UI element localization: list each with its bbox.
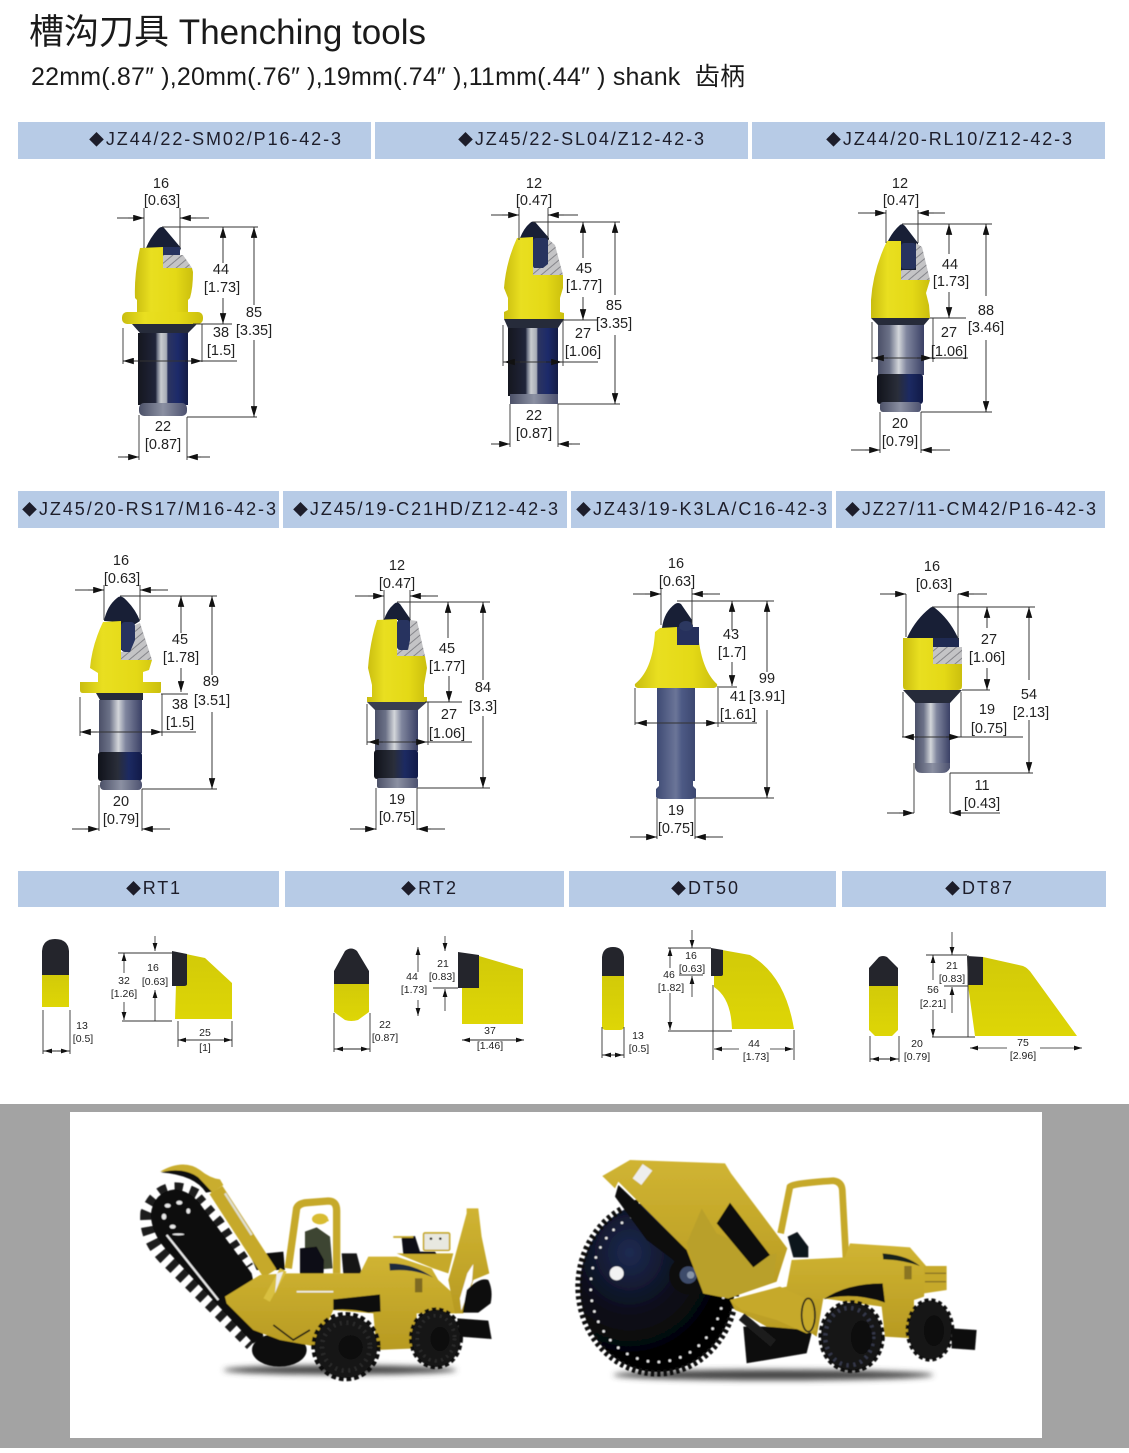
panel: JZ45/20-RS17 <box>18 491 279 831</box>
dimensions: [1.06] <box>969 650 1005 666</box>
panel: RT2 <box>285 871 564 1052</box>
grey backdrop <box>0 1104 1129 1448</box>
dimensions: [2.13] <box>1013 705 1049 721</box>
tip drawings <box>869 956 1077 1036</box>
header band <box>18 491 279 528</box>
dimensions: [0.5] <box>73 1033 93 1045</box>
dimensions <box>334 936 524 1052</box>
dimensions: [1.73] <box>933 274 969 290</box>
dimensions: 16 <box>147 962 159 974</box>
header band <box>569 871 836 907</box>
tip drawings <box>602 947 794 1030</box>
tip drawings <box>334 948 523 1024</box>
dimensions: 25 <box>199 1027 211 1039</box>
dimensions: [1.77] <box>566 278 602 294</box>
dimensions: 44 <box>213 262 229 278</box>
dimensions: [1.73] <box>204 280 240 296</box>
dimensions: [2.96] <box>1010 1050 1036 1062</box>
dimensions: [0.87] <box>145 437 181 453</box>
header band: ◆JZ45/19-C21HD/Z12-42-3 <box>293 499 558 519</box>
dimensions: [3.3] <box>469 699 497 715</box>
dimensions: 89 <box>203 674 219 690</box>
dimensions: 27 <box>441 707 457 723</box>
dimensions <box>117 176 272 460</box>
header band <box>842 871 1106 907</box>
dimensions: 44 <box>942 257 958 273</box>
dimensions: [3.35] <box>596 316 632 332</box>
header band <box>752 122 1105 159</box>
vehicle: rock saw wheel trencher <box>579 1160 977 1380</box>
dimensions <box>350 558 497 830</box>
tool drawing <box>367 602 427 788</box>
tool drawing <box>871 224 930 412</box>
tool drawing <box>504 222 564 404</box>
tool drawing <box>122 227 203 416</box>
header band: ◆JZ44/22-SM02/P16-42-3 <box>89 129 341 149</box>
dimensions: 88 <box>978 303 994 319</box>
dimensions: [0.63] <box>142 976 168 988</box>
dimensions: [0.43] <box>964 796 1000 812</box>
dimensions: 44 <box>406 971 418 983</box>
header band <box>18 122 371 159</box>
dimensions: 19 <box>668 803 684 819</box>
dimensions: 45 <box>172 632 188 648</box>
dimensions: 44 <box>748 1038 760 1050</box>
dimensions: [0.5] <box>629 1043 649 1055</box>
header band: ◆RT1 <box>126 878 180 898</box>
dimensions <box>851 176 1004 453</box>
dimensions: [1.82] <box>658 982 684 994</box>
header band: ◆DT50 <box>671 878 738 898</box>
dimensions: 45 <box>439 641 455 657</box>
panel: DT87 <box>842 871 1106 1063</box>
dimensions: 37 <box>484 1025 496 1037</box>
dimensions: 11 <box>974 778 990 794</box>
panel: JZ44/20-RL10 <box>752 122 1105 453</box>
dimensions <box>72 553 230 831</box>
header band <box>836 491 1105 528</box>
dimensions: 32 <box>118 975 130 987</box>
dimensions: 21 <box>437 958 449 970</box>
dimensions <box>870 932 1082 1063</box>
dimensions: 16 <box>924 559 940 575</box>
dimensions: 99 <box>759 671 775 687</box>
header band: ◆RT2 <box>401 878 456 898</box>
dimensions: 16 <box>113 553 129 569</box>
dimensions: 20 <box>911 1038 923 1050</box>
dimensions: [1.61] <box>720 707 756 723</box>
dimensions: 13 <box>632 1030 644 1042</box>
panel: JZ45/22-SL04 <box>375 122 748 447</box>
tip drawings <box>42 939 232 1019</box>
dimensions: 13 <box>76 1020 88 1032</box>
dimensions: 20 <box>892 416 908 432</box>
dimensions <box>630 556 785 839</box>
dimensions: [3.46] <box>968 320 1004 336</box>
dimensions: [1.78] <box>163 650 199 666</box>
dimensions: 12 <box>892 176 908 192</box>
dimensions: 75 <box>1017 1037 1029 1049</box>
dimensions: 56 <box>927 984 939 996</box>
tool drawing <box>80 596 161 790</box>
dimensions: [0.83] <box>939 973 965 985</box>
dimensions: [3.91] <box>749 689 785 705</box>
dimensions: 16 <box>668 556 684 572</box>
dimensions: [0.75] <box>379 810 415 826</box>
dimensions: [0.63] <box>104 571 140 587</box>
dimensions: 19 <box>389 792 405 808</box>
dimensions: [0.75] <box>971 721 1007 737</box>
dimensions: [1.73] <box>743 1051 769 1063</box>
dimensions: 22 <box>379 1019 391 1031</box>
header band: ◆JZ45/22-SL04/Z12-42-3 <box>458 129 704 149</box>
subtitle: 22mm(.87″ ),20mm(.76″ ),19mm(.74″ ),11mm(.44″ ) shank 齿柄 <box>31 63 745 91</box>
dimensions: 41 <box>730 689 746 705</box>
dimensions: [0.75] <box>658 821 694 837</box>
dimensions <box>491 176 632 447</box>
white photo area <box>70 1112 1042 1438</box>
header band <box>283 491 567 528</box>
dimensions: [1.06] <box>565 344 601 360</box>
dimensions: 16 <box>685 950 697 962</box>
dimensions: 27 <box>981 632 997 648</box>
dimensions: [2.21] <box>920 998 946 1010</box>
dimensions <box>43 936 232 1054</box>
dimensions <box>602 930 794 1063</box>
title: 槽沟刀具 Thenching tools <box>29 13 426 52</box>
dimensions: [0.83] <box>429 971 455 983</box>
dimensions: 84 <box>475 680 491 696</box>
dimensions: 85 <box>606 298 622 314</box>
dimensions: [1.06] <box>429 726 465 742</box>
dimensions: [1.73] <box>401 984 427 996</box>
dimensions: 43 <box>723 627 739 643</box>
panel: RT1 <box>18 871 279 1054</box>
dimensions: [0.47] <box>379 576 415 592</box>
dimensions: [0.79] <box>103 812 139 828</box>
dimensions: 21 <box>946 960 958 972</box>
header band: ◆JZ43/19-K3LA/C16-42-3 <box>576 499 827 519</box>
header band: ◆JZ45/20-RS17/M16-42-3 <box>22 499 276 519</box>
dimensions: 16 <box>153 176 169 192</box>
dimensions: [1.26] <box>111 988 137 1000</box>
dimensions: [0.47] <box>883 193 919 209</box>
dimensions: [0.63] <box>659 574 695 590</box>
dimensions: 38 <box>172 697 188 713</box>
header band: ◆JZ27/11-CM42/P16-42-3 <box>845 499 1096 519</box>
dimensions: 20 <box>113 794 129 810</box>
dimensions <box>880 559 1049 813</box>
tool drawing <box>635 603 717 799</box>
dimensions: [0.47] <box>516 193 552 209</box>
dimensions: 19 <box>979 702 995 718</box>
tool drawing <box>903 607 962 773</box>
dimensions: [0.63] <box>679 963 705 975</box>
dimensions: [0.63] <box>916 577 952 593</box>
panel: JZ27/11-CM42 <box>836 491 1105 813</box>
machine photo panel <box>0 1104 1129 1448</box>
dimensions: [1] <box>199 1042 211 1054</box>
dimensions: 38 <box>213 325 229 341</box>
dimensions: [1.5] <box>166 715 194 731</box>
dimensions: [1.77] <box>429 659 465 675</box>
dimensions: [0.87] <box>516 426 552 442</box>
header band <box>285 871 564 907</box>
dimensions: 12 <box>389 558 405 574</box>
panel: JZ44/22-SM02 <box>18 122 371 460</box>
dimensions: 22 <box>526 408 542 424</box>
dimensions: 46 <box>663 969 675 981</box>
dimensions: 27 <box>941 325 957 341</box>
panel: DT50 <box>569 871 836 1063</box>
header band <box>375 122 748 159</box>
dimensions: [3.35] <box>236 323 272 339</box>
panel: JZ45/19-C21HD <box>283 491 567 830</box>
dimensions: [0.63] <box>144 193 180 209</box>
dimensions: [0.79] <box>882 434 918 450</box>
dimensions: 12 <box>526 176 542 192</box>
header band: ◆DT87 <box>945 878 1012 898</box>
vehicle: chain trencher with backhoe <box>149 1165 492 1379</box>
dimensions: 27 <box>575 326 591 342</box>
header band <box>571 491 832 528</box>
header band: ◆JZ44/20-RL10/Z12-42-3 <box>826 129 1072 149</box>
dimensions: [0.87] <box>372 1032 398 1044</box>
panel: JZ43/19-K3LA <box>571 491 832 839</box>
dimensions: [1.46] <box>477 1040 503 1052</box>
dimensions: 85 <box>246 305 262 321</box>
dimensions: [3.51] <box>194 693 230 709</box>
dimensions: 45 <box>576 261 592 277</box>
dimensions: 22 <box>155 419 171 435</box>
dimensions: [1.7] <box>718 645 746 661</box>
dimensions: [1.06] <box>931 344 967 360</box>
header band <box>18 871 279 907</box>
dimensions: [1.5] <box>207 343 235 359</box>
dimensions: 54 <box>1021 687 1037 703</box>
dimensions: [0.79] <box>904 1051 930 1063</box>
